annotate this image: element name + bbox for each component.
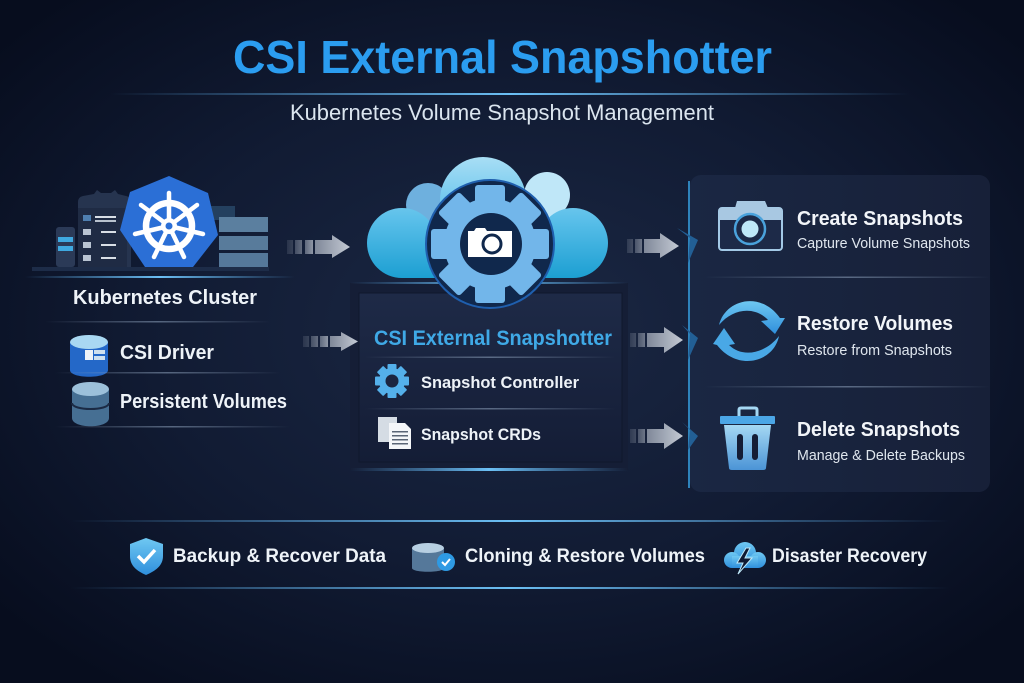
arrow: driver to panel [303, 332, 358, 351]
icon: small gear [375, 364, 409, 398]
icon: shield [130, 538, 163, 575]
heading: Kubernetes Cluster: Kubernetes Cluster [73, 287, 257, 309]
icon: persistent volumes cylinder [72, 382, 109, 426]
icon: cloud with lightning [724, 542, 766, 574]
benefit: Backup & Recover Data [130, 538, 386, 575]
icon: documents [378, 417, 411, 449]
arrow: delete [630, 423, 683, 449]
icon: database check [412, 543, 455, 572]
icon: CSI driver cylinder [70, 335, 108, 377]
panel: CSI External Snapshotter [350, 282, 628, 471]
cloud [367, 157, 608, 278]
icon: storage stack [210, 206, 268, 267]
gear [426, 180, 554, 308]
label: Snapshot CRDs: Snapshot CRDs [421, 425, 541, 444]
label: Snapshot Controller: Snapshot Controller [421, 373, 579, 392]
benefit: Backup & Recover Data: Backup & Recover Data [173, 546, 386, 567]
icon: shelf [25, 267, 295, 278]
panel heading: CSI External Snapshotter [374, 327, 612, 350]
label: Restore Volumes: Restore Volumes [797, 313, 953, 335]
icon: cloud with gear and camera [367, 157, 608, 308]
icon: refresh arrows [713, 301, 785, 361]
panel: snapshot actions [677, 175, 990, 492]
arrow: create [627, 233, 679, 258]
benefit: Cloning & Restore Volumes [412, 543, 705, 572]
icon: trash can [720, 408, 775, 470]
icon: small server [56, 227, 75, 267]
label: Create Snapshots: Create Snapshots [797, 208, 963, 230]
arrow: cluster to cloud [287, 235, 350, 258]
icon: kubernetes helm [120, 176, 218, 267]
label: Persistent Volumes: Persistent Volumes [120, 391, 287, 413]
benefit: Cloning & Restore Volumes: Cloning & Restore Volumes [465, 546, 705, 567]
benefit: Disaster Recovery [724, 542, 927, 574]
subtitle: Kubernetes Volume Snapshot Management [290, 100, 714, 125]
label: Delete Snapshots: Delete Snapshots [797, 419, 960, 441]
arrow: restore [630, 327, 683, 353]
camera glyph [468, 228, 512, 257]
sublabel: Manage & Delete Backups: Manage & Delete Backups [797, 447, 965, 464]
sublabel: Restore from Snapshots: Restore from Snapshots [797, 342, 952, 359]
title: CSI External Snapshotter [233, 31, 772, 83]
icon: tall server [78, 190, 131, 267]
chevron markers [677, 228, 698, 450]
panel: Kubernetes cluster [25, 176, 295, 278]
icon: camera [719, 201, 782, 250]
sublabel: Capture Volume Snapshots: Capture Volume Snapshots [797, 235, 970, 252]
benefit: Disaster Recovery: Disaster Recovery [772, 546, 927, 567]
label: CSI Driver: CSI Driver [120, 342, 214, 364]
